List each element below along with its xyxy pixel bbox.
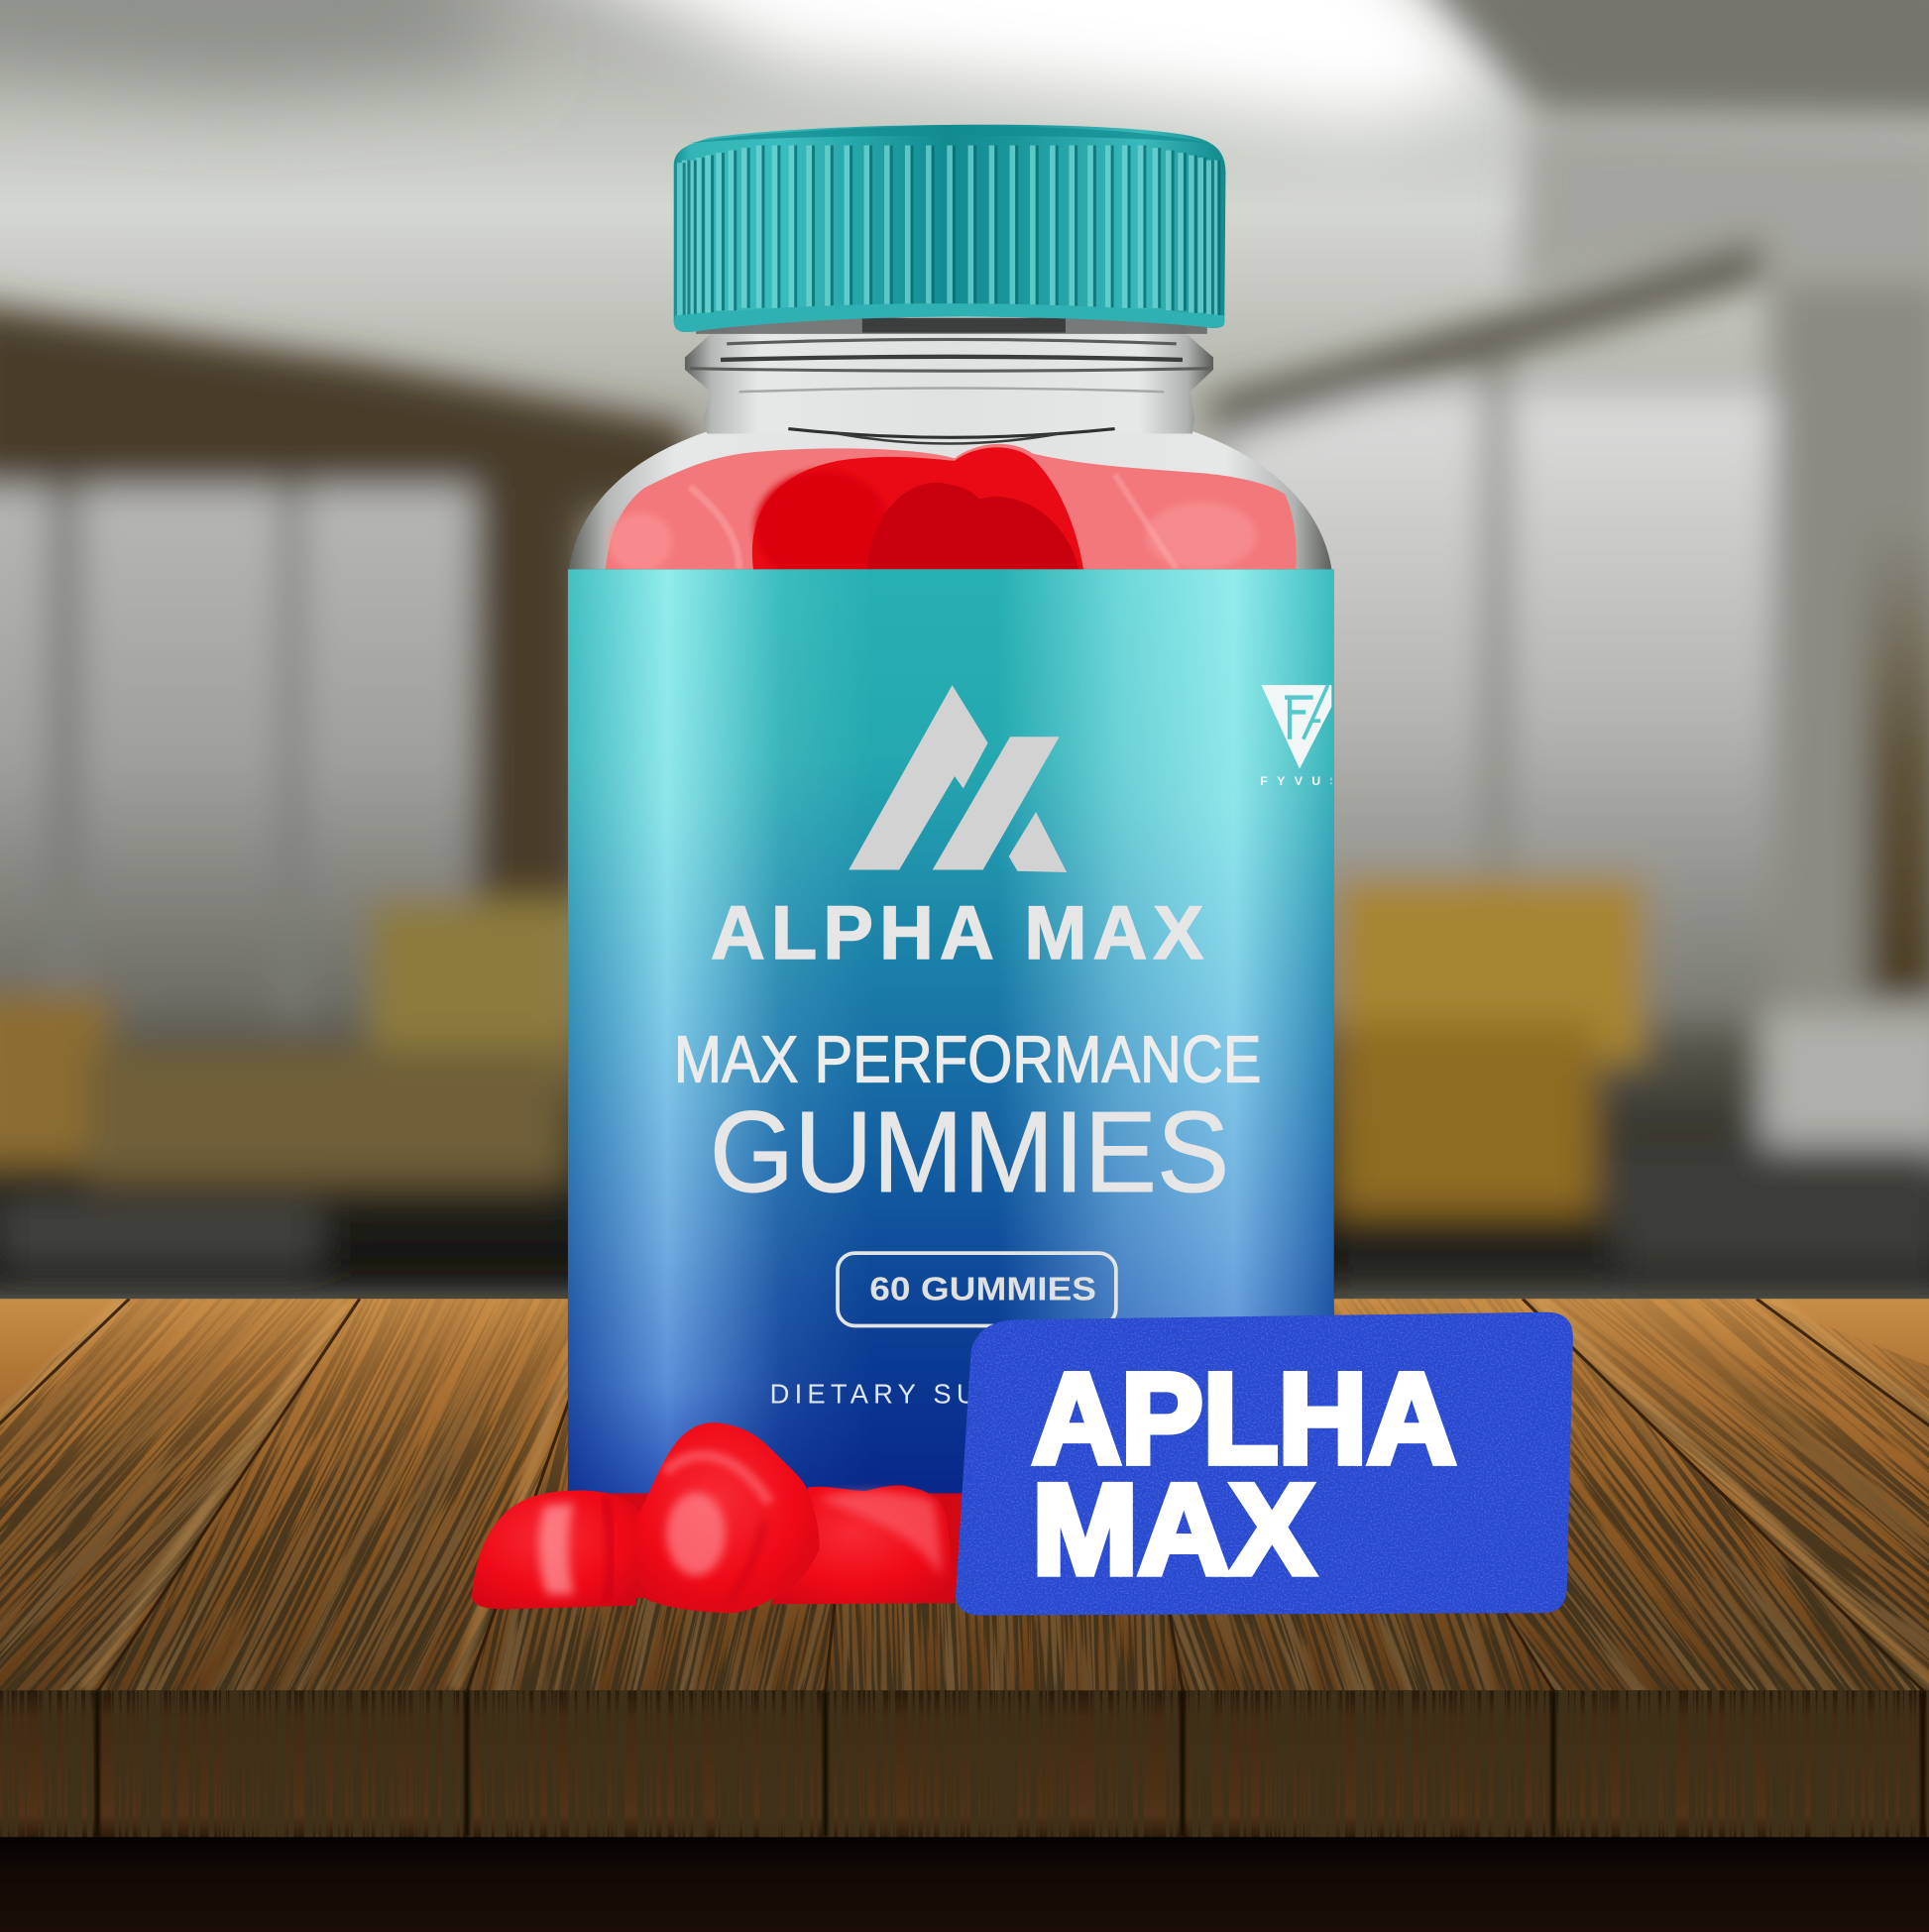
product title line: MAX PERFORMANCE [674,1022,1261,1096]
table top surface [0,1299,1929,1691]
gummies inside jar [605,444,1297,584]
glass neck [685,314,1213,443]
label logo mark [849,685,1067,872]
card text MAX: MAX [1032,1458,1314,1601]
blurred interior background [0,0,1929,1307]
brand name: ALPHA MAX [711,891,1203,975]
red gummies on the table [472,1422,973,1613]
teal ribbed cap [674,125,1225,332]
table front edge [0,1690,1929,1837]
brand mark FYVUS [1261,684,1332,785]
wooden table [0,1299,1929,1932]
table shadow base [0,1837,1929,1932]
count badge [838,1253,1116,1325]
dietary supplement line: DIETARY SUPPLEMENT [770,1379,1169,1410]
right gummy [771,1485,955,1604]
brand mark FYVUS: FYVUS [1260,774,1347,788]
gummy strip behind [579,1493,973,1598]
product title large: GUMMIES [710,1088,1229,1216]
glass jar shoulder [568,431,1333,579]
left gummy [472,1491,643,1609]
card text APLHA: APLHA [1032,1347,1456,1490]
bottle label [568,569,1347,1496]
center gummy [634,1422,820,1613]
count badge: 60 GUMMIES [869,1271,1096,1307]
blue name card [949,1307,1579,1622]
gummy bottle [568,125,1347,1496]
